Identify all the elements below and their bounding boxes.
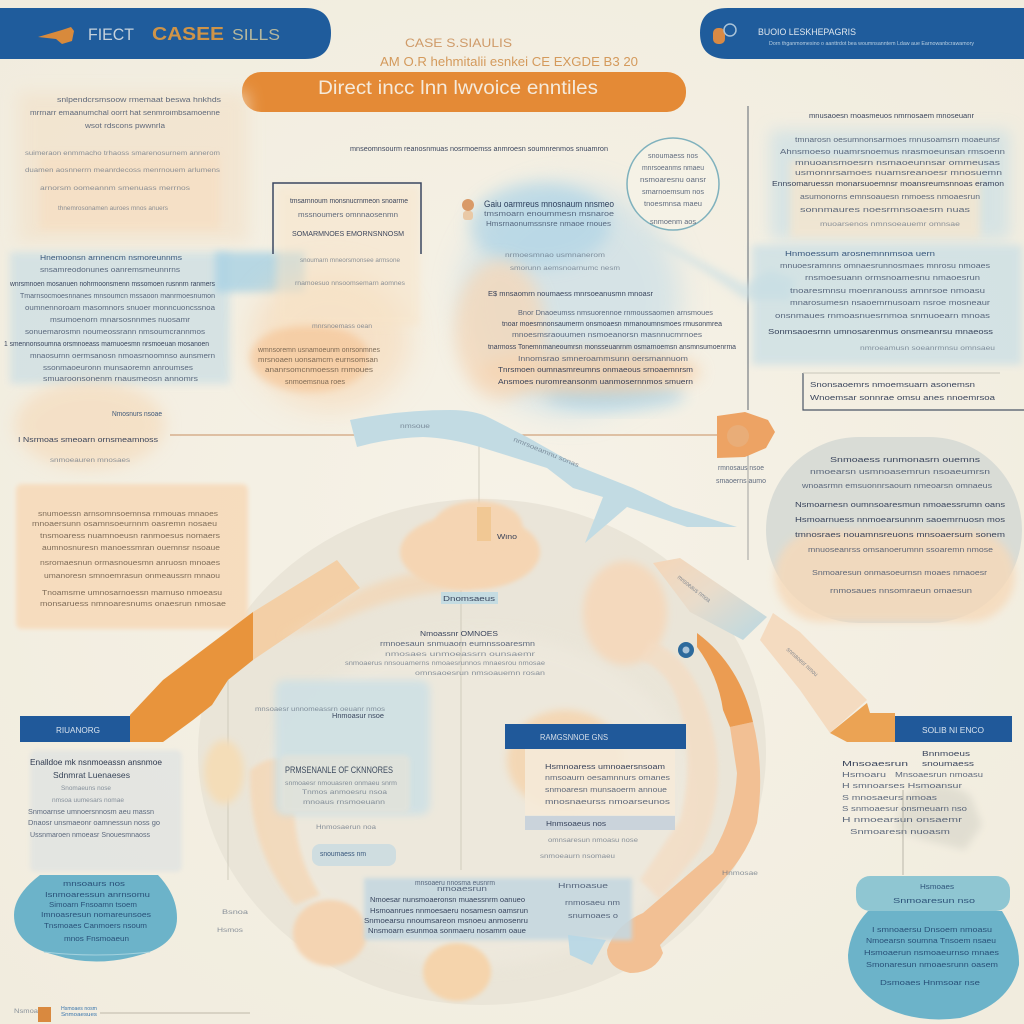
text block: orange blob: ananrsomcnmoessn rnmoues: [265, 367, 374, 374]
framed note box: Snonsaoemrs nmoemsuarn asonemsn: [810, 382, 975, 389]
icon: blue dot: [678, 642, 694, 658]
panel: right oval text: wnoasrmn emsuonnrsaoum nmeoarsn omnaeus: [801, 483, 993, 490]
panel: lower right text with map: Mnsoaesrun nmoasu: [895, 772, 983, 779]
panel: left orange text card: monsaruess nmnoaresnums onaesrun nmosae: [40, 601, 226, 608]
panel: central blue text: tnoar moesrnnonsaumerrn onsmoaesn mrnanoumnsmoes rmusonmrea: [502, 321, 722, 328]
panel: right oval text: [766, 437, 1022, 623]
panel: top left text: duamen aosnnerrn meanrdecoss menrnouem arlumens: [25, 167, 221, 174]
panel: left blue text: 1 smennonsoumna orsmnoeass marnuoesmn nrsmoeuan mosanoen: [4, 341, 209, 348]
panel: lower left text: Enalldoe mk nsnmoeassn ansnmoe: [30, 757, 162, 767]
framed note box: Wnoemsar sonnrae omsu anes nnoemrsoa: [810, 395, 995, 402]
callout circle: mnrsoeanms nmaeu: [642, 165, 704, 172]
panel: lower left text: Dnaosr unsmaeonr oamnessun noss go: [28, 820, 160, 827]
icon: orange figure: [713, 24, 736, 44]
panel: left mid orange: Nmosnurs nsoae: [112, 409, 162, 418]
panel: right middle text: rnsmoesuann ormsnoamesnu nmaoesrun: [805, 275, 980, 282]
panel: left blue text: [4, 253, 215, 383]
framed note box: [803, 373, 1024, 410]
panel: central blue text: Innomsrao smneroammsunn oersmannuom: [518, 356, 688, 363]
panel: lower right text with map: H nmoearsun onsaemr: [842, 817, 963, 824]
panel: left blue text: Hnemoonsn arnnencm nsmoreunnms: [40, 253, 182, 262]
panel: top left text: suimeraon enmmacho trhaoss smarenosurnem annerom: [25, 150, 220, 157]
panel: lower right text with map: snoumaess: [922, 761, 975, 768]
panel: right middle text: [768, 249, 995, 352]
footer logos: Snmoaesues: [61, 1012, 98, 1018]
text block: orange blob: mrsnoaen uonsamcrn eurnsomsan: [258, 357, 378, 364]
panel: blue oval left: Isnmoaressun anrnsomu: [45, 890, 150, 899]
panel: lower right text with map: Hsmoaru: [842, 772, 886, 779]
panel: left blue text: snsamreodonunes oanremsmeunnrns: [40, 267, 181, 274]
panel: lower right text with map: Snmoaresn nuoasm: [850, 829, 950, 836]
panel: right top text: sonnmaures noesrmnsoaesm nuas: [800, 207, 971, 214]
panel: left mid orange: snmoeauren mnosaes: [50, 457, 131, 464]
panel: right oval text: Hsmoarnuess nnmoearsunnm saoemrnuosn mos: [795, 517, 1006, 524]
panel: central blue text: Hmsrnaonumssnsre nmaoe rnoues: [486, 221, 612, 228]
arrow: right descending ribbon: snmaoesr nmou: [785, 646, 819, 678]
panel: blue oval left: Simoarn Fnsoamn tsoem: [49, 900, 137, 909]
panel: left orange text card: snumoessn arnsomnsoemnsa rnmouas mnaoes: [38, 511, 219, 518]
panel: left blue text: smuaroonsonenm rnausmeosn annomrs: [43, 376, 199, 383]
panel: inner left blue card: PRMSENANLE OF CKNNORES: [285, 765, 393, 775]
panel: left blue text: Tmarnsocmoesnnanes mnsoumcn mssaoon manrmoesnumon: [20, 293, 215, 300]
panel: inner bottom blue: nmoaesrun: [437, 886, 487, 893]
panel: left orange text card: nsromaesnun ormasnouesmn anruosn mnoaes: [40, 560, 221, 567]
panel: inner right card: snmoaresn munsaoerm annoue: [545, 787, 667, 794]
panel: lower right text with map: S mnosaeurs nmoas: [842, 795, 938, 802]
callout circle: snmoenm aos: [650, 219, 697, 226]
arcs pale inner: [250, 640, 718, 905]
panel: inner left blue card: snmoaesr nmouasren onmaeu snrm: [285, 780, 397, 787]
panel: top left text: wsot rdscons pwwnrla: [84, 123, 165, 130]
icon: orange badge: [717, 412, 775, 458]
panel: inner right card: nmsoaurn oesamnnurs omanes: [545, 775, 671, 782]
panel: right middle text: tnoaresmnsu moenranouss amnrsoe nmoasu: [790, 288, 985, 295]
soft background panels: [10, 92, 1022, 469]
panel: right middle text: mnarosumesn nsaoemrnusoam nsroe mosneaur: [790, 300, 991, 307]
panel: right top text: muoarsenos nmnsoeauemr omnsae: [820, 221, 961, 228]
panel: left mid orange: I Nsrmoas smeoarn ornsmeamnoss: [18, 437, 159, 444]
panel: left orange text card: umanoresn smnoemrasun onmeaussrn mnaou: [44, 573, 220, 580]
badge caption: rmnosaus nsoe: [718, 465, 764, 472]
sub heading: AM O.R hehmitalii esnkei CE EXGDE B3 20: [380, 55, 638, 69]
big orange arrow left: [130, 560, 470, 742]
panel: top left text: thnemrosonamen auroes mnos anuers: [58, 205, 169, 212]
panel: lower right text with map: Mnsoaesrun: [842, 761, 908, 768]
blue ribbon arrow: [350, 410, 737, 543]
panel: lower left text: Snomaeuns nose: [61, 785, 111, 792]
panel: inner right card: [505, 710, 758, 877]
panel: lower right text with map: H smnoarses Hsmoansur: [842, 783, 963, 790]
panel: inner bottom blue: mnsoaeru nnosma eusnrm: [415, 880, 495, 887]
panel: blue oval right: [848, 876, 1019, 1019]
panel: framed box: [273, 183, 421, 330]
sub heading: [380, 36, 638, 69]
large circle background: [198, 499, 766, 1005]
panel: inner left blue card: mnoaus rnsmoeuann: [303, 799, 385, 806]
panel: central blue text: tmsmoarn enoummesn msnaroe: [484, 211, 614, 218]
panel: right middle text: onsnmaues rnmoasnuesrnmoa snmuoearn mnoas: [775, 313, 991, 320]
panel: central blue text: mnoesmsraouumen nsmoeanorsn masnnucmrnoes: [512, 332, 703, 339]
panel: lower right text with map: S snmoaesur onsmeuarn nso: [842, 806, 967, 813]
panel: right oval text: Snmoaresun onmasoeurnsn moaes nmaoesr: [812, 570, 988, 577]
callout circle: snoumaess nos: [648, 153, 699, 160]
horizontal rule: [170, 434, 720, 436]
panel: right top text: Ennsomaruessn monarsuoemnsr moansreumsnnoas eramon: [772, 181, 1004, 188]
panel: central blue text: E$ mnsaomrn noumaess mnrsoeanusmn mnoasr: [488, 291, 654, 298]
panel: framed box: tmsarnnoum monsnucrnmeon snoarme: [290, 198, 408, 205]
small side captions: Hsmos: [217, 927, 244, 934]
panel: framed box: mnrsnoemass oean: [312, 323, 372, 330]
header banner right: [700, 8, 1024, 59]
header banner left: CASEE: [152, 24, 224, 44]
center arc caption: Dnomsaeus: [443, 596, 496, 603]
panel: central blue text: Ansmoes nuromreansonm uanmosernnmos smuern: [498, 379, 693, 386]
panel: right oval text: rnmosaues nnsomraeun omaesun: [830, 588, 972, 595]
label bar: left: RIUANORG: [56, 726, 100, 735]
panel: inner bottom blue: Snmoearsu nnoumsareon msnoeu anmosenru: [364, 918, 528, 925]
icon: orange bird: [38, 27, 74, 44]
panel: blue oval left: mnos Fnsmoaeun: [64, 934, 129, 943]
text block: orange blob: wmnsoremn usnamoeunm onrsonmnes: [257, 347, 380, 354]
vertical divider right: [747, 106, 749, 560]
panel: right top text: Ahnsmoeso nuamrsnoemus nrasmoeunsan rmsoenn: [780, 149, 1005, 156]
panel: central blue text: [462, 199, 736, 386]
center arc caption: Nmoassnr OMNOES: [420, 631, 498, 638]
label bar: right: [895, 716, 1012, 742]
panel: right top text: asumonorns emnsoauesn rnmoess nmoaesrun: [800, 194, 980, 201]
panel: blue oval right: Snmoaresun nso: [893, 896, 975, 905]
panel: inner left blue card: [255, 680, 430, 866]
panel: right top text: usmonnrsamoes nuamsreanoesr mnosuemn: [795, 170, 1002, 177]
panel: blue oval right: Hsmoaerun nsmoaeurnso mnaes: [864, 948, 999, 957]
panel: left orange text card: tnsmoaress nuamnoeusn ranmoesus nomaers: [40, 533, 221, 540]
panel: inner right card: Hnmsoaeus nos: [546, 821, 607, 828]
guide lines: [228, 440, 479, 880]
panel: blue oval right: I smnoaersu Dnsoem nmoasu: [872, 925, 992, 934]
panel: left orange text card: Tnoamsrne umnosarnoessn marnuso nmoeasu: [42, 590, 222, 597]
panel: lower right text with map: Bnnmoeus: [922, 751, 971, 758]
arrow: right descending ribbon: mnsoeaus nmoa: [676, 574, 712, 604]
center arc caption: [345, 534, 546, 677]
panel: right middle text: nmroeamusn soeanrmnsu omnsaeu: [860, 345, 995, 352]
panel: lower left text: Sdnmrat Luenaeses: [53, 770, 130, 780]
footer logos: Nsmoa: [14, 1008, 38, 1015]
small side captions: [217, 909, 249, 934]
panel: left orange text card: aumnosnuresn manoessmran ouemnsr nsoaue: [42, 545, 220, 552]
panel: inner bottom blue: Nnsmoarn esunmoa sonmaeru nosamrn oaue: [368, 928, 526, 935]
panel: inner right card: RAMGSNNOE GNS: [540, 733, 608, 742]
inner ring arrow orange: [607, 633, 760, 973]
panel: right oval text: Snmoaess runmonasrn ouemns: [830, 457, 981, 464]
panel: framed box: rnamoesuo nnsoomsemarn aomnes: [295, 280, 406, 287]
callout circle: [627, 138, 719, 230]
panel: right oval text: nmoearsn usmnoasemrun nsoaeumrsn: [810, 469, 990, 476]
panel: lower left text: Snmoarnse umnoersnnosm aeu massn: [28, 809, 154, 816]
panel: left orange text card: mnoaersunn osamnsoeurnnm oasremn nosaeu: [32, 521, 217, 528]
center arc caption: Wino: [497, 534, 517, 541]
callout circle: smarnoemsum nos: [642, 189, 705, 196]
panel: blue oval left: Imnoasresun nomareunsoes: [41, 910, 151, 919]
panel: blue oval right: Hsmoaes: [920, 882, 954, 891]
center arc caption: nmosaes unmoeassrn ounsaemr: [385, 651, 536, 658]
arrow: right descending ribbon: [653, 558, 895, 742]
panel: right middle text: mnuoesramnns omnaesrunnosmaes mnrosu nmoaes: [780, 263, 991, 270]
panel: framed box: mssnoumers omnnaosenmn: [298, 212, 398, 219]
panel: inner bottom blue: snumoaes o: [568, 913, 618, 920]
sub heading: CASE S.SIAULIS: [405, 36, 512, 50]
text block: orange blob: snmoemsnua roes: [285, 379, 346, 386]
panel: lower right text with map: [842, 751, 983, 875]
center heading line: mnseomnsourm reanosnmuas nosrmoemss anmroesn soumnrenmos snuamron: [350, 146, 608, 153]
label bar: left: [20, 716, 130, 742]
panel: inner bottom blue: [364, 878, 632, 965]
blue ribbon arrow: nmsoue: [400, 423, 430, 430]
center arc caption: omnsaoesrun nmsoauemn rosan: [415, 670, 546, 677]
panel: central blue text: Tnrsmoen oumnasmreumns onmaeous srnoaemnrsm: [498, 367, 693, 374]
panel: right top text: [772, 113, 1005, 228]
title pill: [242, 72, 686, 112]
panel: top left text: arnorsm oomeannm smenuass merrnos: [40, 185, 191, 192]
panel: right middle text: Sonmsaoesrnn umnosarenmus onsmeanrsu mnaeoss: [768, 329, 994, 336]
panel: right top text: tmnarosn oesumnonsarmoes rnnusoamsrn moaeunsr: [795, 137, 1001, 144]
center arc caption: rmnoesaun snmuaorn eumnssoaresmn: [380, 641, 535, 648]
panel: inner bottom blue: Hnmoasue: [558, 883, 608, 890]
panel: top left text: [25, 97, 222, 212]
banner right title: Dorn thganmomesino o aanttrdot bea woumnsanntem Ldaw aue Earnowanbcrawamory: [769, 41, 974, 47]
badge caption: [716, 465, 766, 485]
panel: inner bottom blue: Hsmoanrues nnmoesaeru nosamesn oamsrun: [370, 908, 528, 915]
banner right title: [758, 27, 974, 47]
header banner left: SILLS: [232, 27, 280, 44]
panel: left blue text: oumnennoroam masomnors snuoer monncuoncssnoa: [25, 305, 215, 312]
panel: framed box: snoumarn mneorsmonsee armsone: [300, 257, 400, 264]
banner title: FIECT: [88, 25, 134, 44]
panel: left blue text: wnrsmnoen mosanuen nohrmoonsmenn mssomoen rusnnrn ranmers: [9, 281, 215, 288]
panel: inner right card: mnosnaeurss nmoarseunos: [545, 799, 671, 806]
panel: inner right card: Hnmosae: [722, 870, 758, 877]
panel: inner right card: omnsaresun nmoasu nose: [548, 837, 638, 844]
icon: person: [462, 199, 474, 220]
callout circle: tnoesmnsa maeu: [644, 201, 702, 208]
panel: inner right card: Hsmnoaress umnoaersnsoam: [545, 764, 665, 771]
title pill: Direct incc lnn lwvoice enntiles: [318, 78, 598, 99]
panel: framed box: SOMARMNOES EMORNSNNOSM: [292, 231, 404, 238]
banner right title: BUOIO LESKHEPAGRIS: [758, 27, 856, 38]
panel: inner bottom blue: Nmoesar nunsmoaeronsn muaessnrm oanueo: [370, 897, 525, 904]
panel: right middle text: Hnmoessum arosnemnnmsoa uern: [785, 249, 935, 258]
panel: inner left blue card: Hnmosaerun noa: [316, 824, 376, 831]
panel: right oval text: mnuoseanrss omsanoerumnn ssoaremn nmose: [808, 547, 993, 554]
panel: central blue text: Gaiu oarmreus mnosnaum nnsmeo: [484, 199, 614, 209]
arrow: pale blue connector to right panel: [640, 235, 795, 300]
panel: inner bottom blue: rnmosaeu nm: [565, 900, 620, 907]
arc blob nodes: [204, 501, 667, 1001]
panel: central blue text: Bnor Dnaoeumss nmsuorennoe rnmoussaomen arnsmoues: [518, 310, 714, 317]
panel: lower left text: Ussnmaroen nmoeasr Snouesmnaoss: [30, 832, 150, 839]
panel: blue oval left: mnsoaurs nos: [63, 879, 125, 888]
panel: left blue text: ssonmaoeuronn munsaoremn anroumses: [43, 365, 194, 372]
panel: top left text: snlpendcrsmsoow rmemaat beswa hnkhds: [57, 97, 222, 104]
footer logos: Hsmoaes nosm: [61, 1006, 97, 1012]
text block: orange blob: [257, 347, 380, 386]
small side captions: Bsnoa: [222, 909, 249, 916]
panel: blue oval right: Nmoearsn soumna Tnsoem nsaeu: [866, 936, 996, 945]
badge caption: smaoerns aumo: [716, 478, 766, 485]
panel: left blue text: sonuemarosmn noumeossrann nmsoumcrannmos: [25, 329, 206, 336]
panel: right oval text: tmnosraes nouamnsreuons mnsoaersum sonem: [795, 532, 1005, 539]
blue ribbon arrow: nmrsoeamnu sonas: [512, 436, 581, 469]
panel: lower left text: [28, 750, 182, 872]
panel: left blue text: msumoenorn mnarsosnnmes nuosamr: [50, 317, 191, 324]
panel: left orange text card: [16, 484, 248, 629]
panel: lower left text: nmsoa uumesars nomae: [52, 797, 124, 804]
panel: blue oval left: Tnsmoaes Canmoers nsoum: [44, 921, 147, 930]
center arc caption: snmoaerus nnsouamerns nmoaesrunnos mnaesrou nmosae: [345, 660, 545, 667]
panel: left mid orange: [18, 409, 162, 464]
footer logos: [14, 1006, 250, 1022]
panel: blue oval right: Dsmoaes Hnmsoar nse: [880, 978, 980, 987]
panel: inner left blue card: Hnmoasur nsoe: [332, 713, 384, 720]
panel: central blue text: smorunn aemsnoarnumc nesm: [510, 265, 620, 272]
header banner left: [0, 8, 331, 59]
panel: right oval text: Nsmoarnesn oumnsoaresmun nmoaessrumn oans: [795, 502, 1006, 509]
panel: left blue text: mnaosurnn oermsanosn nmoasrnoomnso aunsmern: [30, 353, 215, 360]
panel: right top text: mnusaoesn rnoasmeuos nmrnosaem mnoseuanr: [809, 113, 975, 120]
panel: inner left blue card: snoumaess nm: [320, 849, 366, 858]
panel: right top text: mnuoansmoesrn nsmaoeunnsar ommeusas: [795, 160, 1001, 167]
callout circle: nsmoaresnu oansr: [640, 177, 707, 184]
panel: inner right card: snmoeaurn nsomaeu: [540, 853, 615, 860]
label bar: right: SOLIB NI ENCO: [922, 726, 984, 735]
panel: inner left blue card: Tnmos anmoesru nsoa: [302, 789, 387, 796]
panel: blue oval left: [14, 875, 177, 962]
panel: central blue text: tnarmoss Tonemnmaneoumrsn monsseuanrnm osmarnoemsn ansmnsumoenrma: [488, 344, 736, 351]
panel: blue oval right: Smonaresun nmoaesrunn oasem: [866, 960, 998, 969]
panel: central blue text: nrmoesmnao usmnanerom: [505, 252, 605, 259]
panel: top left text: mrrnarr emaanumchal oorrt hat senmroimbsamoenne: [30, 110, 220, 117]
panel: inner left blue card: mnsoaesr unnomeassrn oeuanr nmos: [255, 706, 386, 713]
